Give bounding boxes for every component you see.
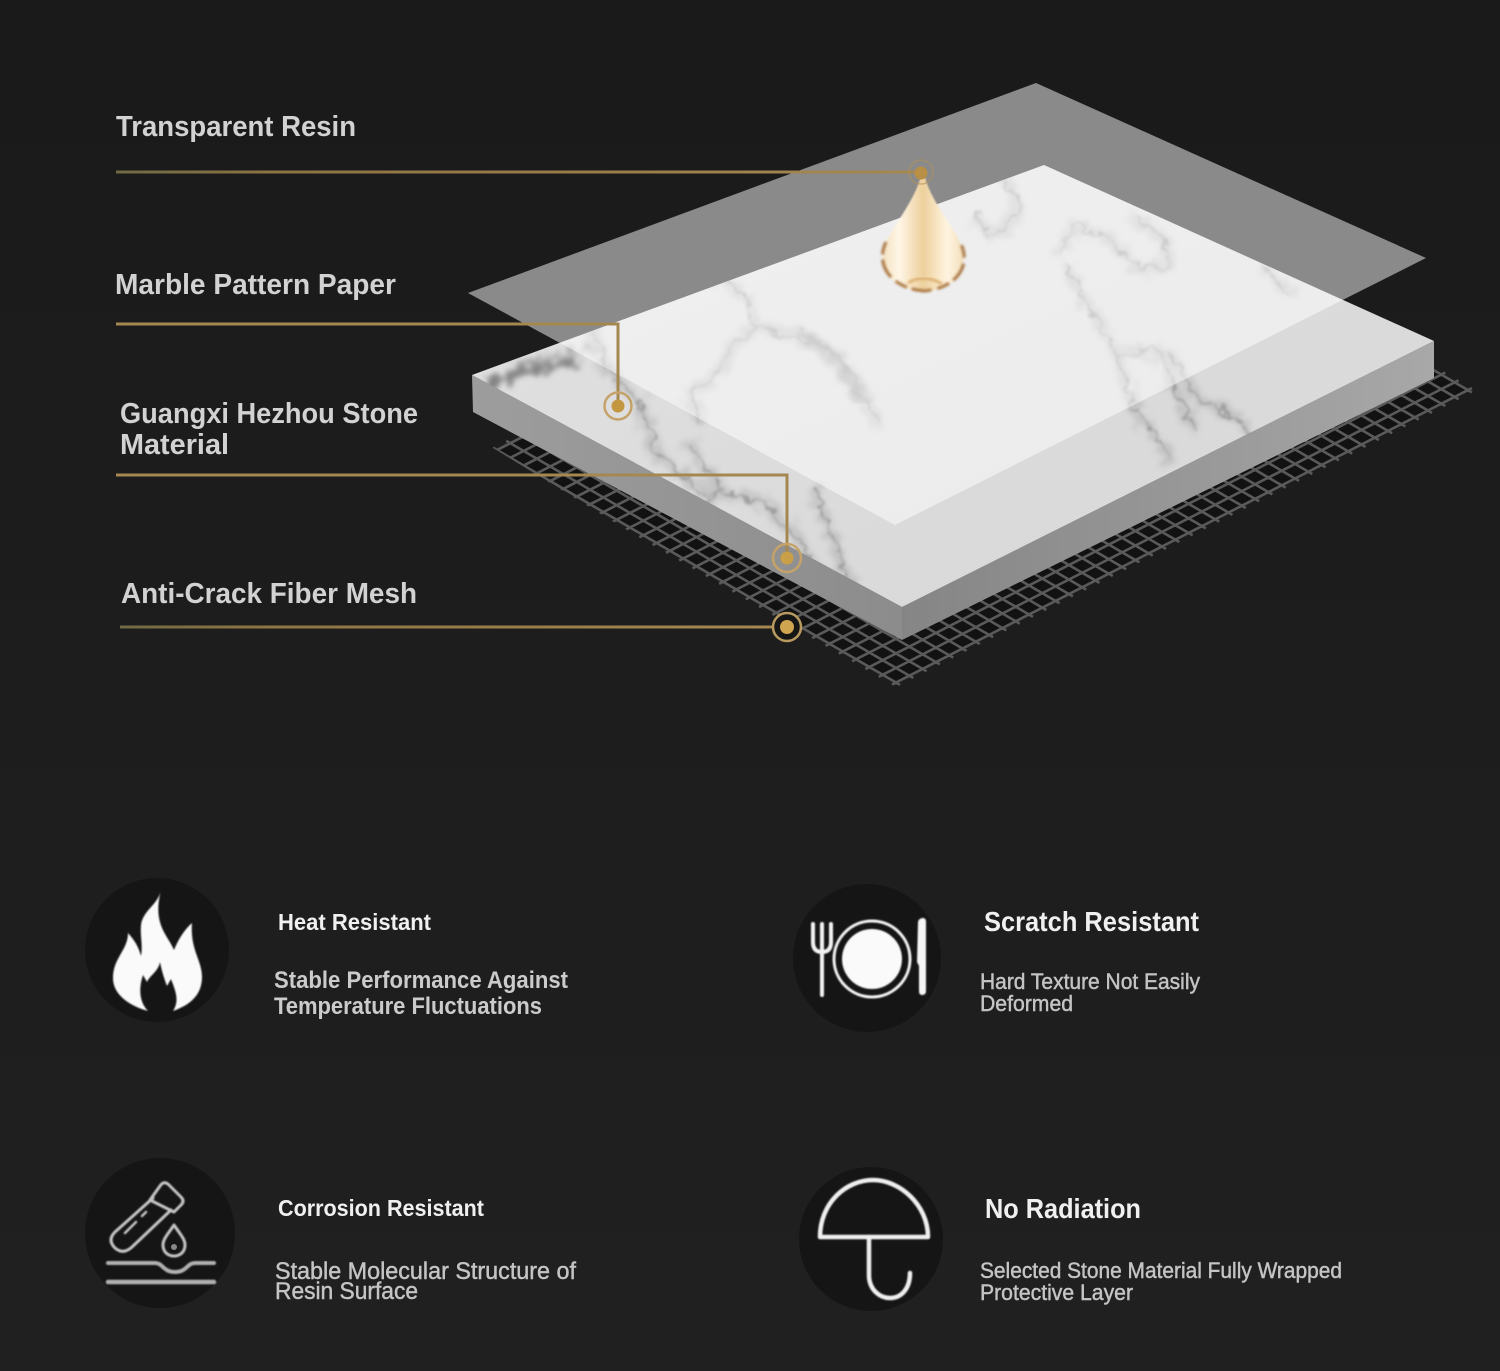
transparent resin sheet [468,83,1426,525]
marble veins [490,180,1290,590]
description [980,1258,1342,1305]
icon: flame [85,878,229,1022]
icon: plate and cutlery [793,884,941,1032]
leader: stone material [116,475,801,572]
description: Temperature Fluctuations [274,993,542,1020]
feature: heat resistant [85,878,568,1022]
feature: no radiation [799,1167,1342,1311]
label: Transparent Resin: Transparent Resin [116,111,356,143]
leader: transparent resin [116,160,933,184]
label: Guangxi Hezhou Stone Material [120,398,418,461]
anti-crack fiber mesh layer [493,354,1472,686]
layered marble panel diagram [468,83,1476,687]
heading: Heat Resistant [278,909,431,935]
description: Selected Stone Material Fully Wrapped [980,1258,1342,1283]
description: Resin Surface [275,1278,418,1305]
description [980,969,1200,1016]
description [274,967,568,1020]
description: Hard Texture Not Easily [980,969,1200,994]
heading: Corrosion Resistant [278,1195,484,1221]
icon: umbrella [799,1167,943,1311]
heading: Scratch Resistant [984,906,1199,937]
leader: marble pattern paper [116,324,632,420]
description: Stable Molecular Structure of [275,1258,576,1285]
description [275,1258,576,1305]
resin droplet [882,166,964,291]
description: Deformed [980,991,1073,1016]
label: Guangxi Hezhou Stone Material: Guangxi Hezhou Stone [120,398,418,430]
feature: corrosion resistant [85,1158,576,1308]
label: Guangxi Hezhou Stone Material: Material [120,429,229,461]
label: Anti-Crack Fiber Mesh: Anti-Crack Fiber Mesh [121,578,417,610]
heading: No Radiation [985,1193,1141,1224]
description: Protective Layer [980,1280,1133,1305]
feature: scratch resistant [793,884,1200,1032]
stone slab [472,165,1434,640]
description: Stable Performance Against [274,967,568,994]
leader: fiber mesh [120,613,801,641]
icon: test tube over surface [85,1158,235,1308]
label: Marble Pattern Paper: Marble Pattern Paper [115,269,396,301]
